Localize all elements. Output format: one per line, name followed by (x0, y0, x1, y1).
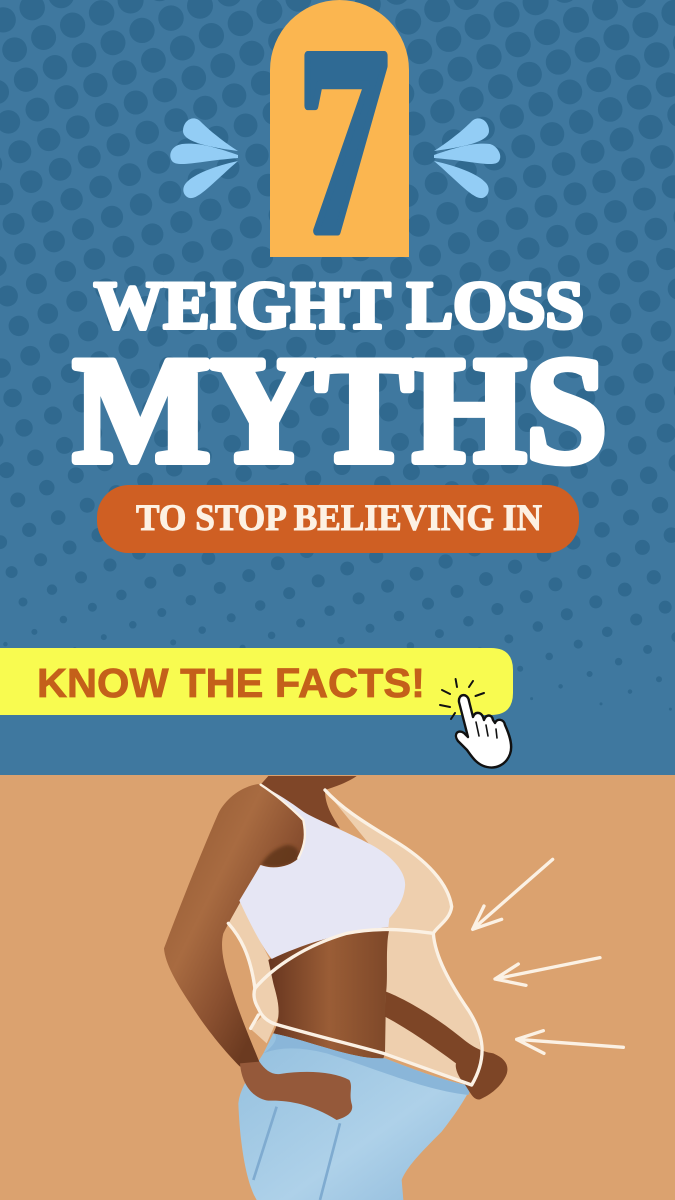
former body silhouette (228, 790, 480, 1085)
underarm shadow (261, 845, 299, 867)
hand on hip (240, 1062, 352, 1120)
arrows (473, 859, 623, 1053)
icon: pointing hand cursor (440, 679, 511, 767)
banner: know the facts: KNOW THE FACTS! (37, 660, 425, 706)
white crop top (239, 785, 405, 959)
orange arch with number 7: 7 (297, 0, 389, 289)
front arm and hand gripping jeans (385, 992, 507, 1099)
rear arm (164, 784, 305, 1067)
peach photo panel (0, 775, 675, 1200)
jeans (238, 1033, 472, 1200)
neck and chest (261, 776, 357, 828)
pill: to stop believing in: TO STOP BELIEVING IN (136, 498, 542, 539)
icon: right splash (434, 118, 500, 198)
pill: to stop believing in (97, 485, 579, 553)
torso skin (268, 929, 389, 1068)
body outline strokes (228, 785, 482, 1085)
orange arch with number 7 (270, 0, 409, 289)
heading: weight loss: WEIGHT LOSS (94, 267, 584, 343)
blue background (0, 0, 675, 775)
banner: know the facts (0, 648, 513, 715)
icon: left splash (170, 118, 238, 198)
heading: myths: MYTHS (73, 326, 607, 494)
waistband shading (263, 1033, 472, 1095)
photo: woman measuring weight loss (164, 776, 623, 1200)
